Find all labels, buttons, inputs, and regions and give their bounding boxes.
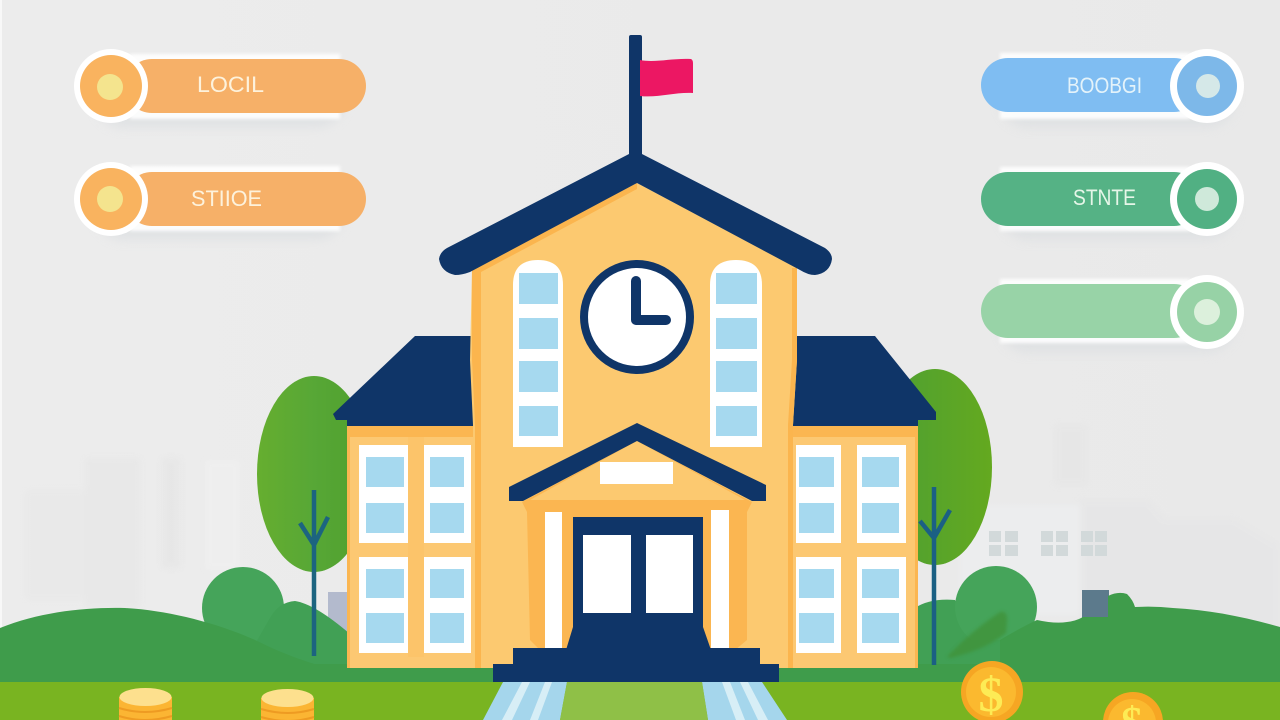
panel: left pill 2 [74,162,366,240]
flagpole [629,35,642,160]
right wing roof [792,336,936,426]
right column [711,510,729,649]
dollar coin: large [961,661,1023,720]
coin stack: left [119,688,172,720]
distant block right [1082,590,1109,622]
central path [483,682,787,720]
tree trunk: left [300,490,328,656]
left edge highlight [0,0,2,720]
faint city skyline: right [960,425,1280,640]
flag [640,59,693,96]
tower window: left [513,260,563,447]
panel: right pill 3 [981,275,1244,353]
bushes and hills: right [915,566,1280,684]
panel: right pill 1: BOOBGI [1067,73,1142,98]
coin stack: middle [261,689,314,720]
panel: right pill 2 [981,162,1244,240]
faint building windows [989,531,1107,556]
ground: lawn band [0,664,1280,683]
portico gable [509,423,766,501]
right wing windows [796,445,906,653]
tree crown: left [257,376,371,572]
ground: grass [0,682,1280,720]
left wing windows [359,445,471,653]
tree crown: right [878,369,992,565]
left wing roof [333,336,476,426]
clock [580,260,694,374]
bushes and hills: left [0,567,360,684]
right wing [788,425,918,668]
panel: left pill 2: STIIOE [191,186,262,211]
main roof [439,154,832,275]
tree trunk: right [920,487,950,665]
panel: right pill 2: STNTE [1073,185,1136,210]
door [566,517,711,650]
panel: left pill 1 [74,49,366,128]
faint city skyline: left [25,458,240,608]
central tower [470,183,797,668]
front steps [493,648,779,682]
portico sign [600,462,673,484]
left column [545,512,562,649]
panel: right pill 1 [981,49,1244,128]
tower window: right [710,260,762,447]
school building [333,35,936,682]
left wing [347,425,477,668]
portico [509,423,766,650]
distant block left [328,592,350,632]
panel: left pill 1: LOCIL [197,72,264,97]
dollar coin: small [1103,692,1163,720]
